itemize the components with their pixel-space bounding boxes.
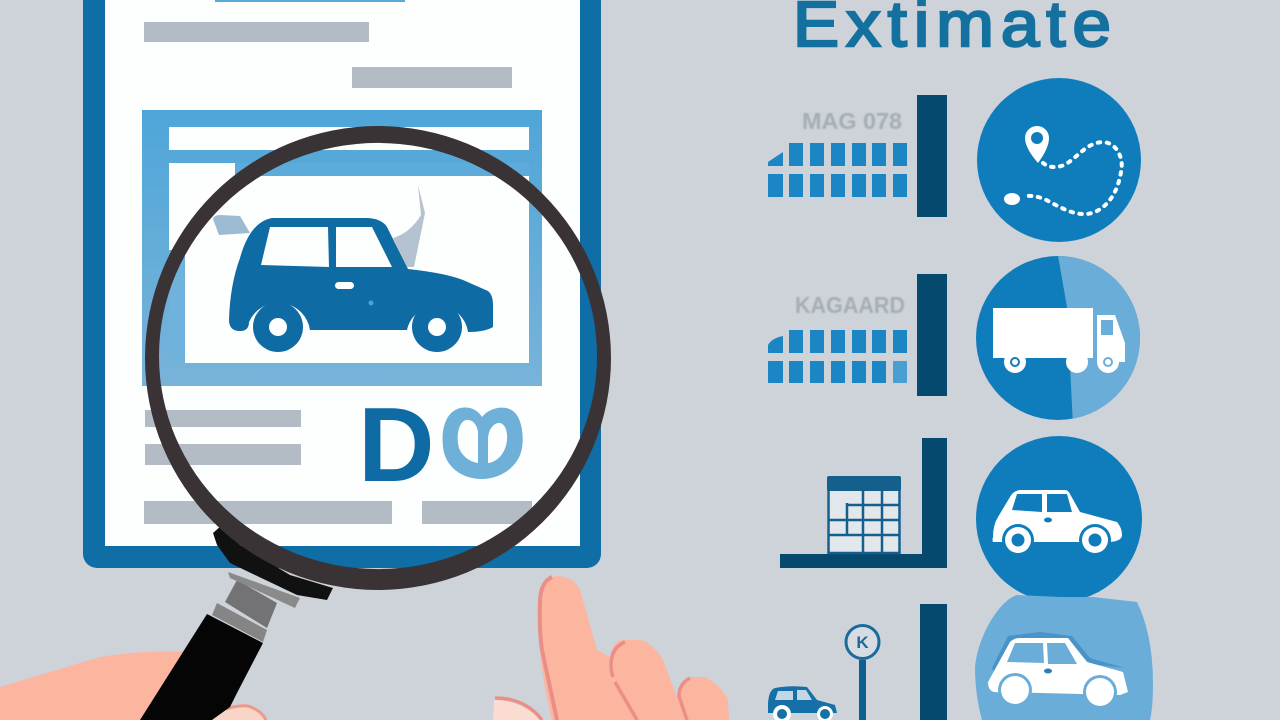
ferrule plate [228,572,300,608]
handle [140,614,263,720]
icon: route circle [977,78,1141,242]
text lines [144,410,532,524]
divider bar [917,95,947,217]
icon: road sign: K [856,633,869,652]
row 1: route distance [768,78,1141,242]
label: MAG 078 [802,108,902,134]
icon: light blue heart glyph [443,407,523,479]
ferrule neck [225,580,277,628]
divider bar [920,604,947,720]
label: KAGAARD [795,292,905,318]
pointing hand [493,576,729,720]
L-shaped bar [780,438,947,568]
icon: smoke behind car [213,185,425,267]
row 3: calendar [780,436,1142,602]
document image frame [142,110,542,386]
lens ring [145,126,611,590]
document letter D: D [358,386,435,504]
icon: light car circle [975,595,1153,720]
block scale [768,330,907,383]
block scale [768,143,907,197]
icon: road sign [846,626,879,720]
row 2: truck [768,250,1150,425]
icon: truck circle [976,256,1140,420]
icon: calendar [827,476,901,554]
icon: car circle [976,436,1142,602]
panel: document [83,0,601,568]
hand holding handle [0,652,266,720]
icon: small car [768,686,837,720]
handle band [212,603,267,642]
collar [213,525,333,600]
icon: main car [229,218,493,352]
magnifying glass [140,126,611,720]
row 4: road sign and small car [768,595,1153,720]
divider bar [917,274,947,396]
